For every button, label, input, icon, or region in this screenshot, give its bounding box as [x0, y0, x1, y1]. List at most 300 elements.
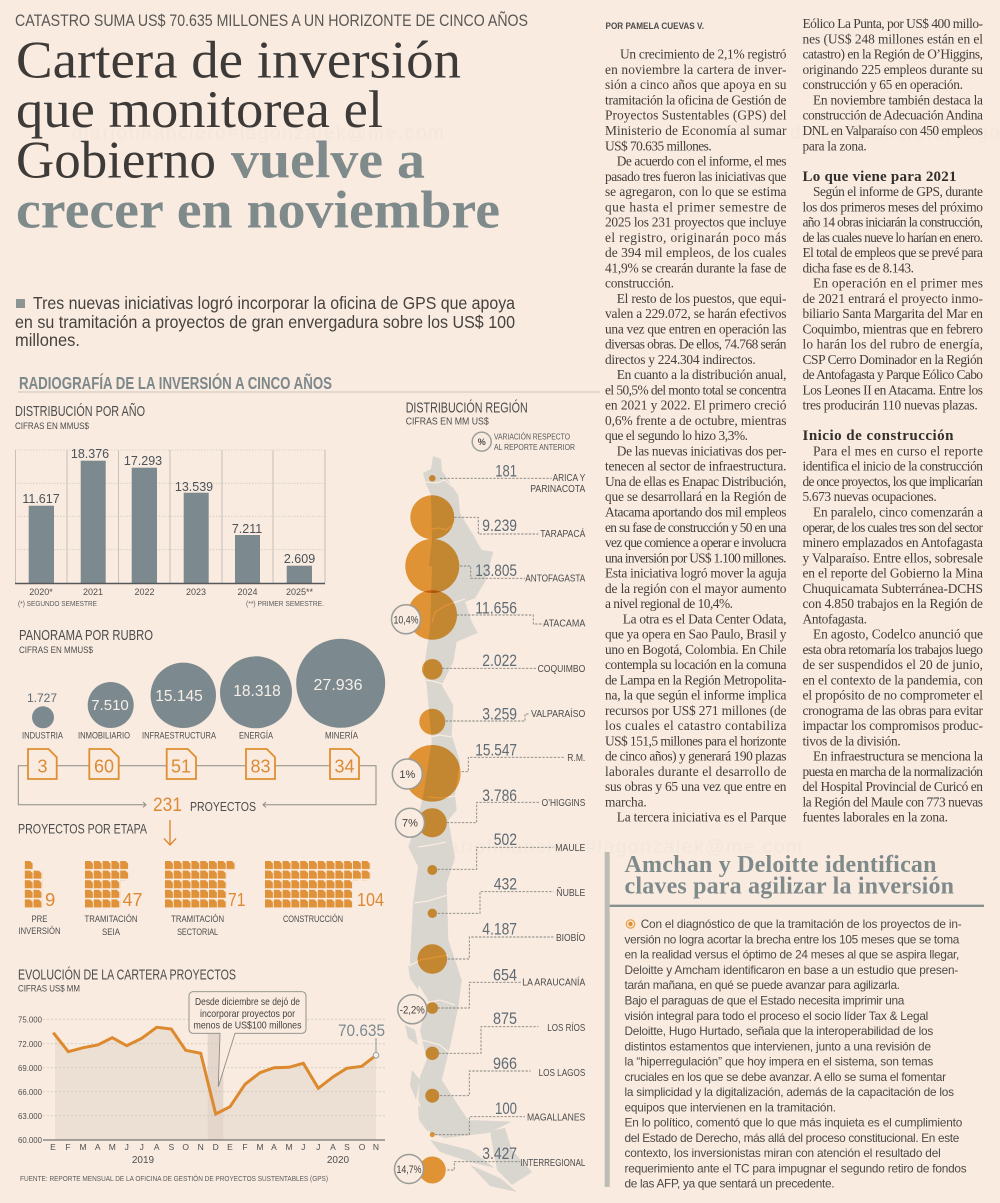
- variation badges: 14,7%: [396, 1164, 422, 1176]
- heading: DISTRIBUCIÓN REGIÓN: [406, 400, 528, 416]
- region bubbles: [404, 475, 461, 1184]
- leader: Maule: [438, 830, 585, 869]
- article column 1: 41,9% se crearán durante la fase de: [605, 260, 787, 275]
- bar chart: 2020*: [29, 587, 53, 597]
- line chart: M: [285, 1142, 293, 1152]
- heading: CIFRAS US$ MM: [18, 984, 80, 994]
- article column 2: construcción de Adecuación Andina: [802, 108, 983, 123]
- article column 2: tres producirán 110 nuevas plazas.: [802, 398, 978, 413]
- panel: proyectos por etapa: [18, 820, 384, 937]
- bar chart: 2021: [83, 587, 103, 597]
- article column 2: impactar los compromisos produc-: [802, 718, 983, 733]
- variation badges: 7%: [402, 818, 418, 830]
- bar chart: 17.293: [124, 454, 162, 468]
- line chart: S: [344, 1142, 350, 1152]
- article column 1: construcción.: [605, 276, 674, 291]
- leader: Los Ríos: 875: [493, 1009, 517, 1028]
- leader: Ñuble: ÑUBLE: [556, 886, 585, 899]
- article column 2: fuentes laborales en la zona.: [802, 810, 948, 825]
- bar chart: [15, 447, 325, 608]
- leader: Antofagasta: 13.805: [475, 561, 517, 580]
- heading: [15, 403, 145, 432]
- article column 1: vez que comience a operar e involucra: [605, 535, 787, 550]
- bar chart: 2025**: [286, 587, 314, 597]
- variation badges: [392, 605, 427, 1184]
- article column 1: que ya opera en Sao Paulo, Brasil y: [605, 627, 787, 642]
- line chart: E: [50, 1142, 56, 1152]
- leader: Ñuble: [438, 874, 585, 913]
- article column 1: que se desarrollará en la Región de: [605, 489, 787, 504]
- article column 1: Ministerio de Economía al sumar: [605, 123, 787, 138]
- variation legend: [472, 432, 575, 452]
- leader: Arica y Parinacota: [440, 462, 585, 495]
- article column 2: El total de empleos que se prevé para: [802, 245, 983, 260]
- article column 1: El resto de los puestos, que equi-: [617, 291, 786, 306]
- stage: construcción: [265, 861, 384, 924]
- article column 2: para la zona.: [802, 138, 867, 153]
- callout: [189, 992, 306, 1087]
- line chart: 69.000: [18, 1063, 42, 1073]
- line chart: N: [373, 1142, 379, 1152]
- sidebar text: requerimiento ante el TC para impugnar el segundo retiro de fondos: [624, 1161, 967, 1175]
- bubble: industria: 1.727: [27, 691, 57, 705]
- article column 2: nes (US$ 248 millones están en el: [802, 31, 983, 46]
- leader: Interregional: INTERREGIONAL: [520, 1157, 585, 1169]
- article column 2: del Hospital Provincial de Curicó en: [802, 779, 983, 794]
- article column 2: en el reporte del Gobierno la Mina: [802, 566, 983, 580]
- section heading: RADIOGRAFÍA DE LA INVERSIÓN A CINCO AÑOS: [19, 372, 332, 393]
- variation legend: %: [478, 437, 486, 447]
- sidebar text: Deloitte y Amcham identificaron en base a un estudio que presen-: [624, 963, 958, 977]
- article column 1: laborales durante el desarrollo de: [605, 764, 787, 779]
- title: Cartera de inversión: [16, 32, 461, 90]
- article column 2: dicha fase es de 8.143.: [802, 260, 914, 275]
- panel: distribución región: [392, 400, 585, 1192]
- stage: pre inversión: PRE: [32, 914, 48, 924]
- article column 1: marcha.: [605, 794, 647, 809]
- article column 2: CSP Cerro Dominador en la Región: [802, 352, 983, 367]
- article column 1: los cuales el catastro contabiliza: [605, 718, 787, 733]
- article column 2: catastro) en la Región de O’Higgins,: [802, 47, 983, 62]
- article column 2: los dos primeros meses del próximo: [802, 199, 983, 214]
- sidebar text: la “hiperregulación” que hoy impera en el sistema, son temas: [624, 1054, 933, 1068]
- bubble: minería: [296, 639, 385, 742]
- article column 2: biliario Santa Margarita del Mar en: [802, 306, 983, 321]
- leader: Coquimbo: 2.022: [482, 651, 517, 670]
- stage: pre inversión: 9: [45, 889, 55, 910]
- sidebar text: En lo político, comentó que lo que más inquieta es el cumplimiento: [624, 1116, 963, 1130]
- leader: Ñuble: 432: [494, 874, 517, 893]
- lede: en su tramitación a proyectos de gran envergadura sobre los US$ 100: [15, 312, 515, 332]
- leader: Tarapacá: TARAPACÁ: [540, 527, 585, 540]
- line chart: M: [79, 1142, 87, 1152]
- leader: R.M.: R.M.: [567, 752, 585, 764]
- article column 2: En infraestructura se menciona la: [813, 749, 983, 764]
- line chart: A: [95, 1142, 101, 1152]
- leader: Coquimbo: COQUIMBO: [538, 663, 585, 675]
- line chart: A: [330, 1142, 336, 1152]
- article column 1: de Lampa en la Región Metropolita-: [605, 672, 786, 687]
- article column 1: US$ 70.635 millones.: [605, 138, 712, 153]
- article column 2: identifica el inicio de la construcción: [802, 459, 983, 474]
- icon: target bullet: [626, 920, 635, 928]
- variation legend: VARIACIÓN RESPECTO: [494, 432, 570, 442]
- bar chart: (*) SEGUNDO SEMESTRE: [18, 601, 97, 608]
- bubble: industria: [22, 691, 64, 742]
- article column 2: Chuquicamata Subterránea-DCHS: [802, 581, 983, 596]
- variation badges: 1%: [399, 769, 415, 781]
- article column 2: construcción y 65 en operación.: [802, 77, 963, 92]
- project count icons: [28, 749, 359, 779]
- article column 2: operar, de los cuales tres son del sector: [802, 520, 984, 535]
- article column 1: US$ 151,5 millones para el horizonte: [605, 733, 787, 748]
- article column 1: que el segundo lo hizo 3,3%.: [605, 428, 748, 443]
- bar chart: (**) PRIMER SEMESTRE.: [246, 601, 324, 608]
- bar chart: 2023: [186, 587, 206, 597]
- bubble: inmobiliario: INMOBILIARIO: [78, 730, 130, 742]
- article column 1: se agregaron, con lo que se estima: [605, 184, 787, 199]
- bubble: infraestructura: [142, 663, 217, 742]
- source: FUENTE: REPORTE MENSUAL DE LA OFICINA DE GESTIÓN DE PROYECTOS SUSTENTABLES (GPS): [20, 1174, 328, 1183]
- leader: R.M.: 15.547: [475, 741, 517, 760]
- leader: Interregional: 3.427: [482, 1144, 517, 1163]
- variation badges: -2,2%: [400, 1004, 425, 1016]
- article column 2: Para el mes en curso el reporte: [813, 444, 983, 458]
- sidebar text: distintos estamentos que intervienen, junto a una revisión de: [624, 1039, 931, 1053]
- bar chart: 13.539: [175, 480, 213, 494]
- article column 1: uno en Bogotá, Colombia. En Chile: [605, 642, 787, 657]
- article column 1: Una de ellas es Enapac Distribución,: [605, 474, 786, 489]
- article column 1: na, la que según el informe implica: [605, 688, 787, 703]
- leader: Los Ríos: [438, 1009, 585, 1053]
- article column 2: la Región del Maule con 773 nuevas: [802, 794, 983, 809]
- kicker: CATASTRO SUMA US$ 70.635 MILLONES A UN HORIZONTE DE CINCO AÑOS: [15, 11, 528, 30]
- bar chart: 2.609: [284, 552, 315, 566]
- sidebar heading: claves para agilizar la inversión: [624, 874, 954, 900]
- article column 2: Coquimbo, mientras que en febrero: [802, 321, 983, 336]
- arrow down: [164, 820, 176, 845]
- sidebar text: [624, 917, 967, 1191]
- project count icons: 83: [250, 757, 271, 777]
- subheading: Lo que viene para 2021: [802, 169, 956, 185]
- text: diariofinanciero#lago: [790, 123, 1000, 144]
- leader: Valparaíso: VALPARAÍSO: [531, 707, 585, 720]
- leader: Tarapacá: 9.239: [482, 516, 517, 535]
- leader: Interregional: [447, 1144, 585, 1170]
- line chart: J: [301, 1142, 305, 1152]
- article column 2: Los Leones II en Atacama. Entre los: [802, 382, 983, 397]
- article column 1: 2025 los 231 proyectos que incluye: [605, 215, 787, 230]
- leader: Maule: MAULE: [555, 842, 585, 854]
- article column 2: En paralelo, cinco comenzarán a: [813, 504, 983, 520]
- panel: evolución de la cartera: [18, 966, 385, 1183]
- leader: Los Ríos: LOS RÍOS: [547, 1021, 585, 1034]
- article column 1: que hasta el primer semestre de: [605, 199, 787, 214]
- article column 1: de cinco años) y generará 190 plazas: [605, 749, 786, 764]
- bar chart: 7.211: [232, 522, 262, 536]
- bubble: minería: 27.936: [314, 677, 363, 694]
- article column 1: sus obras y 65 una vez que entre en: [605, 779, 787, 794]
- heading: DISTRIBUCIÓN POR AÑO: [15, 403, 145, 420]
- heading: PANORAMA POR RUBRO: [19, 628, 153, 644]
- project count icons: 3: [37, 757, 48, 777]
- article column 2: de las cuales nueve lo harían en enero.: [802, 230, 983, 245]
- text: diariofinanciero#lagonzalek@me.com: [430, 837, 802, 858]
- leader: Valparaíso: 3.259: [482, 704, 517, 723]
- leader: Biobío: BIOBÍO: [556, 931, 585, 944]
- article column 2: En operación en el primer mes: [813, 276, 983, 291]
- leader: Magallanes: [435, 1099, 585, 1135]
- article column 1: tramitación la oficina de Gestión de: [605, 92, 787, 108]
- line chart: S: [168, 1142, 174, 1152]
- article column 1: de la región con el mayor aumento: [605, 581, 787, 596]
- article column 2: Según el informe de GPS, durante: [813, 184, 983, 199]
- leader: Los Lagos: LOS LAGOS: [539, 1067, 585, 1079]
- leader: Magallanes: MAGALLANES: [527, 1112, 585, 1124]
- line chart: 63.000: [18, 1111, 42, 1121]
- article column 1: contempla su locación en la comuna: [605, 657, 787, 672]
- variation legend: AL REPORTE ANTERIOR: [494, 443, 575, 452]
- article column 1: en su fase de construcción y 50 en una: [605, 520, 787, 535]
- stage: tramitación sectorial: SECTORIAL: [177, 927, 218, 937]
- leader: Valparaíso: [446, 704, 585, 723]
- leader: La Araucanía: 654: [493, 966, 517, 985]
- line chart: A: [154, 1142, 160, 1152]
- article column 2: 5.673 nuevas ocupaciones.: [802, 489, 937, 504]
- article column 2: DNL en Valparaíso con 450 empleos: [802, 123, 983, 138]
- callout: Desde diciembre se dejó de: [195, 996, 300, 1008]
- article column 2: [802, 16, 984, 825]
- article column 2: de once proyectos, los que implicarían: [802, 474, 983, 489]
- article column 1: directos y 224.304 indirectos.: [605, 352, 756, 367]
- article column 1: una inversión por US$ 1.100 millones.: [605, 550, 786, 565]
- leader: O'Higgins: 3.786: [482, 786, 517, 805]
- map of Chile: [405, 456, 532, 1192]
- leader: Los Lagos: 966: [493, 1054, 517, 1073]
- article column 1: Esta iniciativa logró mover la aguja: [605, 566, 787, 580]
- panel: sidebar Amchan y Deloitte: [605, 852, 984, 1191]
- line chart: A: [271, 1142, 277, 1152]
- title: Gobierno: [16, 132, 216, 190]
- lede: Tres nuevas iniciativas logró incorporar la oficina de GPS que apoya: [33, 293, 515, 313]
- line chart: F: [242, 1142, 248, 1152]
- article column 1: a nivel regional de 10,4%.: [605, 596, 733, 611]
- heading: CIFRAS EN MMUS$: [19, 645, 94, 656]
- bubble: energía: 18.318: [233, 683, 281, 700]
- article column 2: minero emplazados en Antofagasta: [802, 535, 983, 550]
- heading: [19, 628, 153, 656]
- leader: R.M.: [462, 741, 585, 772]
- article column 1: el registro, originarán poco más: [605, 230, 786, 245]
- total projects: 231: [153, 794, 182, 816]
- line chart: 60.000: [18, 1135, 42, 1145]
- stage: construcción: 104: [357, 889, 384, 910]
- article column 1: Atacama aportando dos mil empleos: [605, 504, 786, 520]
- sidebar text: equipos que intervienen en la tramitación.: [624, 1100, 836, 1114]
- heading: PROYECTOS POR ETAPA: [18, 820, 148, 836]
- line chart: J: [125, 1142, 129, 1152]
- leader: La Araucanía: LA ARAUCANÍA: [522, 976, 585, 988]
- stage: tramitación sectorial: [165, 861, 246, 937]
- sidebar text: del Estado de Derecho, más allá del proceso constitucional. En este: [624, 1131, 960, 1145]
- bubble: infraestructura: 15.145: [155, 688, 203, 705]
- callout: incorporar proyectos por: [200, 1008, 295, 1020]
- leader: Antofagasta: [460, 561, 585, 584]
- title: que monitorea el: [16, 81, 383, 139]
- article column 2: año 14 obras iniciarán la construcción,: [802, 215, 983, 230]
- sidebar text: Con el diagnóstico de que la tramitación de los proyectos de in-: [641, 917, 962, 931]
- line chart: [18, 1014, 385, 1166]
- line chart: O: [359, 1142, 366, 1152]
- heading: [18, 966, 236, 994]
- leader: Coquimbo: [442, 651, 585, 675]
- sidebar text: tarán mañana, en qué se puede avanzar para agilizarla.: [624, 978, 900, 992]
- sidebar text: contexto, los inversionistas miran con atención el resultado del: [624, 1146, 941, 1160]
- heading: CIFRAS EN MM US$: [406, 416, 489, 428]
- article column 1: La tercera iniciativa es el Parque: [617, 810, 787, 825]
- article column 1: valen a 229.072, se harán efectivos: [605, 306, 786, 321]
- bubble: infraestructura: INFRAESTRUCTURA: [142, 730, 217, 742]
- stage: tramitación SEIA: 47: [122, 889, 142, 910]
- connector lines to total: [18, 766, 376, 807]
- leader: O'Higgins: O’HIGGINS: [542, 797, 585, 809]
- article column 2: de Antofagasta y Parque Eólico Cabo: [802, 367, 983, 382]
- article column 1: el 50,5% del monto total se concentra: [605, 382, 787, 397]
- leader: O'Higgins: [447, 786, 585, 823]
- stage: pre inversión: [18, 861, 60, 936]
- leader: Los Lagos: [440, 1054, 585, 1096]
- article column 1: Proyectos Sustentables (GPS) del: [605, 108, 787, 123]
- subheading: Inicio de construcción: [802, 428, 954, 444]
- leader: Atacama: ATACAMA: [543, 618, 585, 630]
- total projects: [153, 794, 256, 816]
- line chart: 2019: [132, 1155, 155, 1166]
- article column 2: lo harán los del rubro de energía,: [802, 337, 983, 352]
- article column 2: Antofagasta.: [802, 611, 867, 626]
- article column 1: En cuanto a la distribución anual,: [617, 367, 786, 382]
- sidebar text: versión no logra acortar la brecha entre los 105 meses que se toma: [624, 932, 960, 946]
- lede: millones.: [15, 330, 80, 350]
- article column 1: recursos por US$ 271 millones (de: [605, 703, 787, 718]
- line chart: J: [140, 1142, 144, 1152]
- article column 2: de 2021 entrará el proyecto inmo-: [802, 291, 983, 306]
- article column 2: tivos de la división.: [802, 733, 901, 748]
- stage: tramitación SEIA: [84, 861, 142, 937]
- bubble: industria: INDUSTRIA: [22, 730, 64, 742]
- line chart: M: [109, 1142, 116, 1152]
- article column 2: originando 225 empleos durante su: [802, 62, 983, 77]
- heading: CIFRAS EN MMUS$: [15, 421, 90, 432]
- project count icons: 34: [334, 757, 355, 777]
- article column 1: 0,6% frente a de octubre, mientras: [605, 413, 786, 428]
- article column 2: En noviembre también destaca la: [813, 92, 983, 108]
- leader: La Araucanía: [438, 966, 585, 1008]
- stage: tramitación SEIA: SEIA: [102, 927, 120, 937]
- bubble: minería: MINERÍA: [325, 730, 359, 742]
- sidebar text: de las AFP, ya que sentará un precedente.: [624, 1177, 834, 1191]
- article column 2: el propósito de no comprometer el: [802, 688, 983, 703]
- callout: menos de US$100 millones: [194, 1020, 302, 1032]
- heading: [406, 400, 528, 428]
- leader: Arica y Parinacota: ARICA Y: [553, 472, 585, 484]
- article column 2: puesta en marcha de la normalización: [802, 764, 983, 779]
- title: [16, 32, 500, 239]
- variation badges: 10,4%: [394, 614, 419, 626]
- article column 2: Eólico La Punta, por US$ 400 millo-: [802, 16, 983, 31]
- article column 2: cronograma de las obras para evitar: [802, 703, 984, 718]
- article column 1: De las nuevas iniciativas dos per-: [617, 444, 786, 458]
- article column 1: La otra es el Data Center Odata,: [623, 611, 786, 626]
- sidebar text: en la realidad versus el óptimo de 24 meses al que se aspira llegar,: [624, 948, 959, 962]
- sidebar text: visión integral para todo el proceso el socio líder Tax & Legal: [624, 1009, 928, 1023]
- line chart: 75.000: [18, 1014, 42, 1024]
- line chart: N: [198, 1142, 204, 1152]
- stage: tramitación SEIA: TRAMITACIÓN: [84, 914, 138, 924]
- article column 1: sión a cinco años que apoya en su: [605, 77, 787, 92]
- sidebar text: la simplicidad y la digitalización, además de la capacitación de los: [624, 1085, 954, 1099]
- bubble: inmobiliario: 7.510: [91, 697, 129, 714]
- article column 1: una vez que entren en operación las: [605, 321, 786, 336]
- byline: POR PAMELA CUEVAS V.: [606, 21, 704, 31]
- article column 2: y Valparaíso. Entre ellos, sobresale: [802, 550, 983, 565]
- article column 2: con 4.850 trabajos en la Región de: [802, 596, 983, 611]
- article column 1: tenecen al sector de infraestructura.: [605, 459, 786, 474]
- project count icons: 60: [94, 757, 114, 777]
- line chart: D: [213, 1142, 219, 1152]
- article column 2: en el contexto de la pandemia, con: [802, 672, 983, 687]
- stage: construcción: CONSTRUCCIÓN: [283, 914, 343, 924]
- text: diariofinanciero#lagonzalek@me.com: [72, 123, 444, 144]
- total projects: PROYECTOS: [190, 799, 256, 814]
- line chart: O: [182, 1142, 189, 1152]
- bar chart: 2022: [134, 587, 155, 597]
- line chart: 70.635: [338, 1022, 385, 1040]
- article column 1: en 2021 y 2022. El primero creció: [605, 398, 787, 413]
- line chart: 72.000: [18, 1039, 42, 1049]
- sidebar heading: [624, 852, 954, 900]
- leader: Tarapacá: [454, 516, 585, 540]
- bar chart: 18.376: [71, 447, 109, 461]
- article column 1: De acuerdo con el informe, el mes: [617, 154, 786, 168]
- line chart: F: [65, 1142, 71, 1152]
- line chart: M: [256, 1142, 264, 1152]
- bubble: energía: [220, 656, 292, 742]
- leader: Antofagasta: ANTOFAGASTA: [525, 572, 585, 584]
- panel: distribución por año: [15, 403, 325, 608]
- article column 1: pasado tres fueron las iniciativas que: [605, 169, 787, 184]
- leader: Atacama: 11.656: [475, 598, 517, 617]
- bubble: energía: ENERGÍA: [239, 730, 274, 742]
- article column 1: de 394 mil empleos, de los cuales: [605, 245, 786, 260]
- sidebar text: Deloitte, Hugo Hurtado, señala que la interoperabilidad de los: [624, 1024, 933, 1038]
- stage: tramitación sectorial: 71: [228, 889, 246, 910]
- bubble: inmobiliario: [78, 682, 134, 742]
- leader: Biobío: [448, 919, 585, 959]
- line chart: 2020: [327, 1155, 350, 1166]
- panel: panorama por rubro: [18, 628, 385, 816]
- article column 2: de ser suspendidos el 20 de junio,: [802, 657, 983, 672]
- leader: Magallanes: 100: [495, 1099, 517, 1118]
- article column 1: [605, 47, 787, 825]
- article column 2: En agosto, Codelco anunció que: [813, 627, 983, 642]
- article column 1: diversas obras. De ellos, 74.768 serán: [605, 337, 787, 352]
- article column 1: en noviembre la cartera de inver-: [605, 62, 786, 77]
- leader: Maule: 502: [494, 830, 517, 849]
- heading: EVOLUCIÓN DE LA CARTERA PROYECTOS: [18, 966, 236, 984]
- bar chart: 11.617: [22, 492, 60, 506]
- sidebar heading: Amchan y Deloitte identifican: [624, 852, 936, 878]
- leader: Arica y Parinacota: 181: [495, 462, 517, 481]
